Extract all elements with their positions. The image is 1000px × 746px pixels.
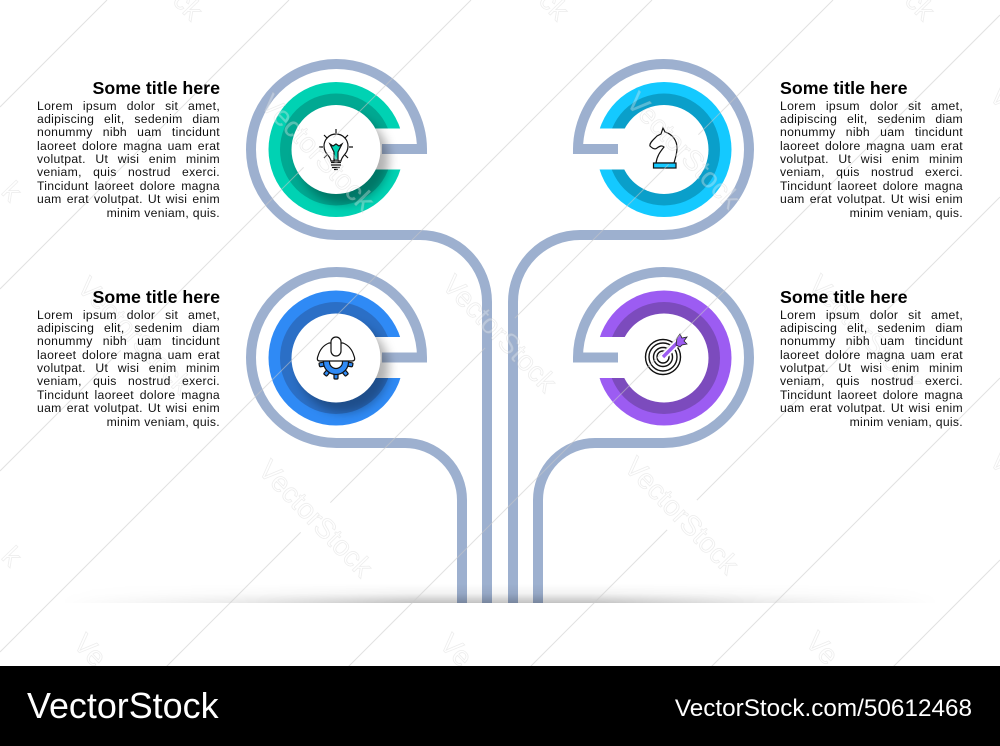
- partial watermarks at the edges: Ve: [68, 628, 113, 673]
- body copy: minim veniam, quis.: [850, 206, 963, 220]
- ground shadow: [136, 590, 864, 603]
- body copy: volutpat. Ut wisi enim minim: [780, 152, 963, 166]
- body copy: uam erat volutpat. Ut wisi enim: [780, 401, 963, 415]
- heading: Some title here: [93, 78, 220, 98]
- icon: light bulb: [319, 129, 353, 170]
- body copy: minim veniam, quis.: [107, 415, 220, 429]
- node: purple ring: [596, 290, 732, 426]
- body copy: nonummy nibh uam tincidunt: [37, 334, 220, 348]
- icon: chess knight: [650, 128, 677, 168]
- body copy: veniam, quis nostrud exerci.: [780, 165, 963, 179]
- watermarks: VectorStock: [72, 271, 198, 401]
- footer brand: VectorStock: [27, 686, 219, 726]
- body copy: uam erat volutpat. Ut wisi enim: [780, 192, 963, 206]
- footer image url: VectorStock.com/50612468: [675, 695, 972, 722]
- body copy: adipiscing elit, sedenim diam: [780, 112, 963, 126]
- branch: bottom left: [251, 272, 462, 603]
- watermarks: VectorStock: [253, 454, 379, 584]
- node: teal ring: [268, 82, 404, 217]
- body copy: Tincidunt laoreet dolore magna: [37, 179, 220, 193]
- heading: Some title here: [780, 287, 907, 307]
- body copy: adipiscing elit, sedenim diam: [37, 321, 220, 335]
- body copy: volutpat. Ut wisi enim minim: [780, 361, 963, 375]
- body copy: laoreet dolore magna uam erat: [37, 139, 220, 153]
- body copy: Lorem ipsum dolor sit amet,: [780, 308, 963, 322]
- icon: target with arrow: [646, 334, 687, 374]
- footer band: [0, 666, 1000, 746]
- heading: Some title here: [780, 78, 907, 98]
- body copy: nonummy nibh uam tincidunt: [780, 334, 963, 348]
- body copy: Lorem ipsum dolor sit amet,: [37, 308, 220, 322]
- watermarks: VectorStock: [437, 269, 563, 399]
- branch: bottom right: [538, 272, 749, 603]
- body copy: volutpat. Ut wisi enim minim: [37, 152, 220, 166]
- watermarks: VectorStock: [803, 269, 929, 399]
- branch: top right: [513, 64, 749, 603]
- icon: helmet and gear: [317, 337, 355, 379]
- body copy: laoreet dolore magna uam erat: [37, 348, 220, 362]
- body copy: veniam, quis nostrud exerci.: [37, 374, 220, 388]
- partial watermarks at the edges: Ve: [434, 628, 479, 673]
- text block: bottom left: [37, 287, 220, 429]
- body copy: laoreet dolore magna uam erat: [780, 348, 963, 362]
- body copy: Lorem ipsum dolor sit amet,: [37, 98, 220, 112]
- body copy: nonummy nibh uam tincidunt: [37, 125, 220, 139]
- body copy: laoreet dolore magna uam erat: [780, 139, 963, 153]
- text block: top right: [780, 78, 963, 220]
- watermarks: VectorStock: [621, 86, 747, 216]
- body copy: adipiscing elit, sedenim diam: [780, 321, 963, 335]
- body copy: minim veniam, quis.: [850, 415, 963, 429]
- text block: bottom right: [780, 287, 963, 429]
- body copy: Tincidunt laoreet dolore magna: [780, 179, 963, 193]
- partial watermarks at the edges: Ve: [800, 626, 845, 671]
- node: cyan ring: [596, 82, 732, 217]
- body copy: Tincidunt laoreet dolore magna: [37, 388, 220, 402]
- body copy: [37, 308, 220, 429]
- watermarks: VectorStock: [255, 88, 381, 218]
- body copy: nonummy nibh uam tincidunt: [780, 125, 963, 139]
- tree branches: [251, 64, 749, 603]
- body copy: Tincidunt laoreet dolore magna: [780, 388, 963, 402]
- watermarks: VectorStock: [619, 451, 745, 581]
- heading: Some title here: [93, 287, 220, 307]
- body copy: veniam, quis nostrud exerci.: [780, 374, 963, 388]
- body copy: uam erat volutpat. Ut wisi enim: [37, 401, 220, 415]
- branch: top left: [251, 64, 487, 603]
- body copy: [780, 308, 963, 429]
- body copy: uam erat volutpat. Ut wisi enim: [37, 192, 220, 206]
- body copy: minim veniam, quis.: [107, 206, 220, 220]
- node: blue ring: [268, 290, 404, 426]
- body copy: adipiscing elit, sedenim diam: [37, 112, 220, 126]
- body copy: [780, 98, 963, 220]
- body copy: volutpat. Ut wisi enim minim: [37, 361, 220, 375]
- body copy: veniam, quis nostrud exerci.: [37, 165, 220, 179]
- text block: top left: [37, 78, 220, 220]
- body copy: Lorem ipsum dolor sit amet,: [780, 98, 963, 112]
- body copy: [37, 98, 220, 220]
